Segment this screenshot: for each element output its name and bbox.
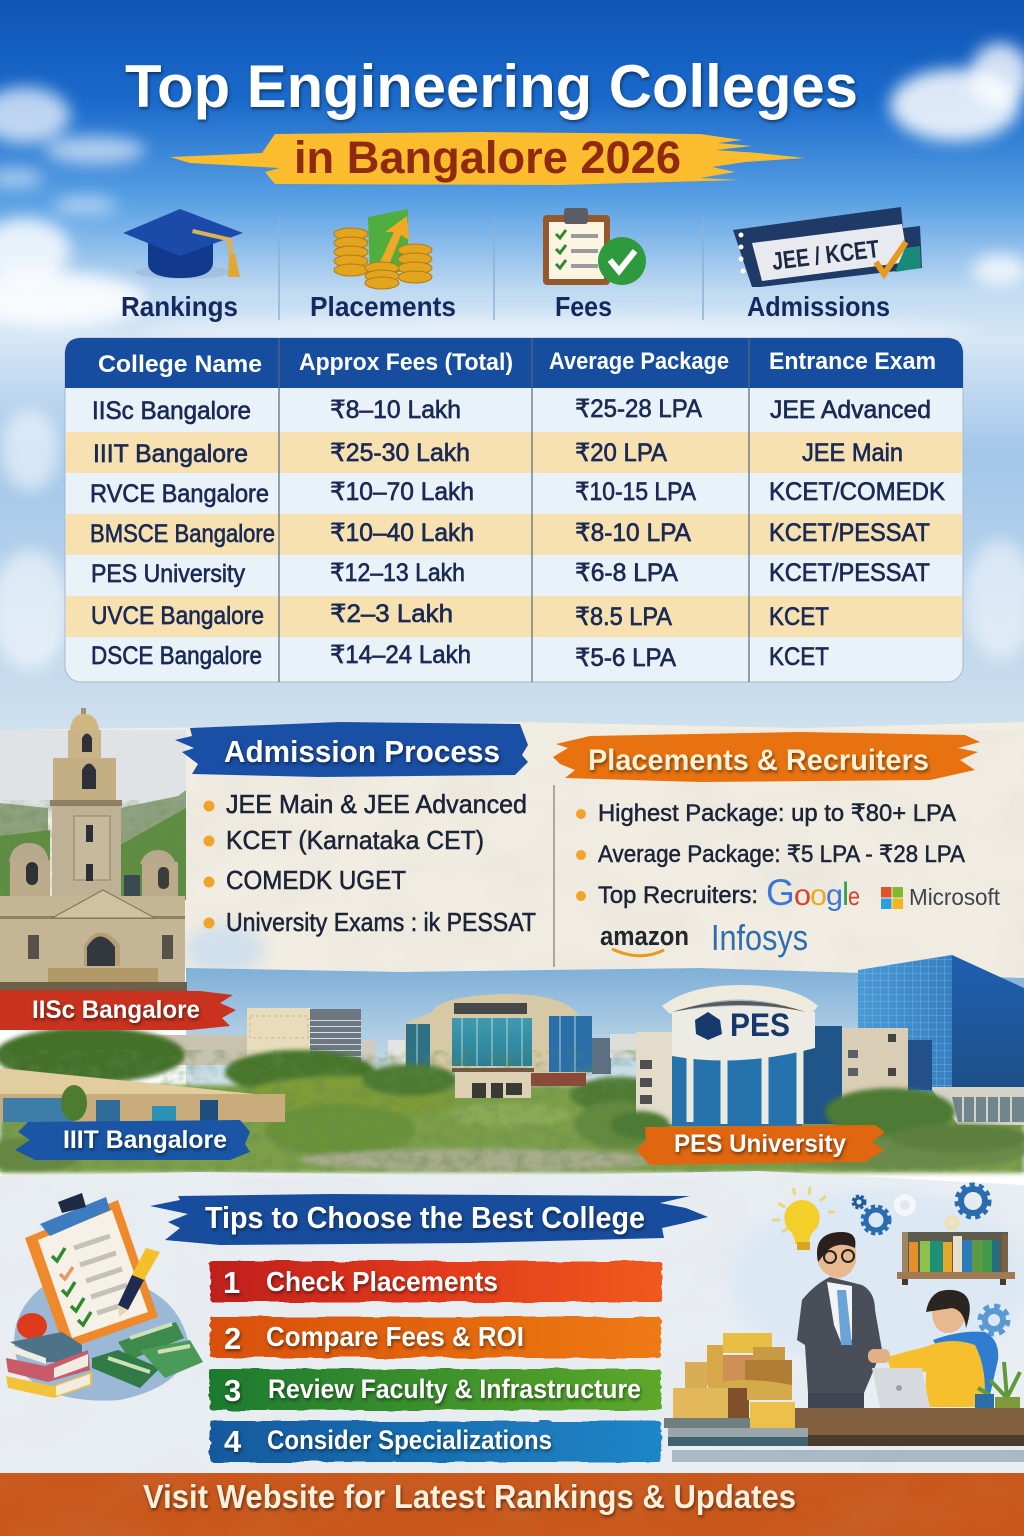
icon labels: Rankings bbox=[121, 291, 238, 322]
table rows: ₹20 LPA bbox=[575, 439, 667, 467]
hills behind tower bbox=[0, 790, 186, 900]
logo: Google: o bbox=[794, 879, 811, 912]
illustration: counsellor and student bbox=[664, 1185, 1024, 1446]
table rows: ₹10–40 Lakh bbox=[330, 519, 474, 547]
heading: tips bbox=[150, 1194, 708, 1245]
subtitle banner: in Bangalore 2026 bbox=[294, 132, 681, 183]
icon row bbox=[121, 207, 922, 322]
icon: JEE / KCET ticket: JEE / KCET bbox=[770, 235, 881, 276]
clouds bbox=[0, 43, 1024, 670]
logo: Google: o bbox=[810, 879, 827, 912]
table rows: ₹2–3 Lakh bbox=[330, 600, 453, 628]
building: blue glass tower bbox=[858, 955, 1024, 1125]
table rows: ₹25-28 LPA bbox=[575, 395, 702, 423]
paper panel: tips bbox=[0, 1171, 1024, 1480]
label: IISc Bangalore bbox=[0, 990, 236, 1030]
label: IIIT Bangalore bbox=[15, 1120, 250, 1160]
table rows: ₹10-15 LPA bbox=[575, 478, 696, 506]
tip 4: 4 bbox=[224, 1424, 242, 1459]
greenery bbox=[0, 1027, 1024, 1173]
label: PES University bbox=[636, 1125, 885, 1165]
tip 3: Review Faculty & Infrastructure bbox=[268, 1374, 641, 1404]
illustration: campus landscape bbox=[0, 955, 1024, 1173]
man in suit bbox=[797, 1232, 882, 1409]
table rows: ₹10–70 Lakh bbox=[330, 478, 474, 506]
table rows: IIIT Bangalore bbox=[93, 440, 248, 468]
logo: Google: G bbox=[766, 872, 795, 913]
table rows: IISc Bangalore bbox=[92, 397, 251, 425]
logo: Google bbox=[766, 872, 860, 913]
tip 3: 3 bbox=[224, 1373, 241, 1408]
foreground bushes bbox=[610, 1088, 1024, 1152]
placements list bbox=[576, 800, 965, 909]
heading: tips: Tips to Choose the Best College bbox=[205, 1200, 645, 1235]
table header: Average Package bbox=[549, 348, 729, 375]
main block bbox=[0, 890, 187, 991]
table rows: KCET bbox=[769, 603, 829, 631]
apple bowl bbox=[17, 1313, 47, 1339]
table rows: RVCE Bangalore bbox=[90, 480, 269, 508]
laptop bbox=[872, 1368, 930, 1408]
icon: clipboard with check bbox=[543, 208, 646, 285]
desk shadow bbox=[672, 1450, 1024, 1462]
placements list: Highest Package: up to ₹80+ LPA bbox=[598, 800, 956, 827]
tip 1 bbox=[210, 1261, 662, 1302]
bullets bbox=[204, 800, 214, 928]
table rows: JEE Advanced bbox=[770, 396, 931, 424]
admission list: University Exams : ik PESSAT bbox=[226, 907, 536, 937]
gold boxes bbox=[673, 1333, 855, 1428]
heading: admission process: Admission Process bbox=[224, 734, 500, 769]
sky background bbox=[0, 0, 1024, 730]
icon labels: Admissions bbox=[747, 291, 890, 322]
logo: amazon: amazon bbox=[600, 921, 689, 951]
table rows: KCET/PESSAT bbox=[769, 559, 930, 587]
left and right turrets bbox=[9, 843, 178, 897]
table rows: ₹14–24 Lakh bbox=[330, 641, 471, 669]
bell tower bbox=[50, 708, 122, 898]
table rows bbox=[90, 395, 945, 672]
admission list: COMEDK UGET bbox=[226, 865, 406, 895]
heading: admission process bbox=[175, 722, 528, 777]
table rows: DSCE Bangalore bbox=[91, 642, 262, 670]
table header: Entrance Exam bbox=[769, 348, 936, 375]
table rows: BMSCE Bangalore bbox=[90, 520, 275, 548]
money stacks bbox=[92, 1322, 203, 1388]
placements list: Average Package: ₹5 LPA - ₹28 LPA bbox=[598, 841, 965, 868]
foliage texture bbox=[0, 1050, 1024, 1172]
table rows: UVCE Bangalore bbox=[91, 602, 264, 630]
icon: coins and money bbox=[334, 209, 432, 289]
subtitle banner bbox=[170, 132, 805, 185]
footer banner bbox=[0, 1473, 1024, 1536]
illustration: IISc tower bbox=[0, 708, 187, 991]
tip 1: Check Placements bbox=[266, 1266, 498, 1297]
logo: Google: l bbox=[842, 876, 849, 912]
building: PES: PES bbox=[730, 1007, 790, 1043]
table rows: ₹8–10 Lakh bbox=[330, 396, 461, 424]
admission list: JEE Main & JEE Advanced bbox=[226, 789, 527, 819]
plant bbox=[975, 1362, 1020, 1413]
table rows: ₹12–13 Lakh bbox=[330, 559, 465, 587]
logo: Google: e bbox=[848, 881, 860, 911]
table rows: KCET bbox=[769, 643, 829, 671]
light bulb bbox=[772, 1187, 835, 1250]
admission list: KCET (Karnataka CET) bbox=[226, 825, 484, 855]
illustration: checklist, books and money bbox=[6, 1193, 203, 1401]
table rows: JEE Main bbox=[802, 439, 903, 467]
building: round glass bbox=[405, 994, 592, 1073]
tip 2 bbox=[210, 1317, 661, 1358]
books bbox=[6, 1332, 92, 1398]
paper panel: admission and placements bbox=[0, 722, 1024, 980]
small blocks bbox=[362, 1034, 638, 1074]
heading: placements and recruiters: Placements & Recruiters bbox=[588, 744, 929, 777]
icon: JEE / KCET ticket bbox=[733, 207, 922, 287]
desk bbox=[664, 1408, 1024, 1446]
bullets bbox=[576, 809, 586, 901]
label: IIIT Bangalore: IIIT Bangalore bbox=[63, 1126, 227, 1154]
icon labels bbox=[121, 291, 890, 322]
logo: Microsoft: Microsoft bbox=[909, 884, 1001, 910]
label: PES University: PES University bbox=[674, 1130, 846, 1158]
table rows: ₹8.5 LPA bbox=[575, 603, 672, 631]
low house bbox=[452, 1068, 586, 1098]
icon: graduation cap bbox=[123, 209, 243, 279]
title: Top Engineering Colleges bbox=[125, 53, 858, 120]
heading: placements and recruiters bbox=[553, 732, 980, 782]
tip 2: 2 bbox=[224, 1321, 241, 1356]
table rows: PES University bbox=[91, 560, 245, 588]
table header bbox=[98, 348, 936, 378]
building: IIIT bbox=[0, 1068, 285, 1122]
logo: Infosys: Infosys bbox=[711, 917, 808, 958]
table rows: ₹5-6 LPA bbox=[575, 644, 676, 672]
table rows: ₹6-8 LPA bbox=[575, 559, 678, 587]
tip 3 bbox=[209, 1369, 661, 1410]
clipboard bbox=[25, 1193, 158, 1350]
table rows: KCET/COMEDK bbox=[769, 478, 945, 506]
label: IISc Bangalore: IISc Bangalore bbox=[32, 996, 200, 1024]
admission list bbox=[204, 789, 536, 937]
student bbox=[868, 1290, 998, 1407]
comparison table bbox=[65, 338, 963, 682]
tip 1: 1 bbox=[223, 1265, 240, 1300]
table rows: ₹8-10 LPA bbox=[575, 519, 691, 547]
placements list: Top Recruiters: bbox=[598, 882, 758, 909]
bookshelf bbox=[897, 1232, 1015, 1285]
blue blob bbox=[14, 1275, 188, 1401]
building: PES bbox=[636, 985, 932, 1126]
tip 4 bbox=[210, 1421, 661, 1462]
table rows: ₹25-30 Lakh bbox=[330, 439, 470, 467]
building: hotel block bbox=[140, 1008, 361, 1067]
table header: College Name bbox=[98, 351, 262, 378]
icon labels: Placements bbox=[310, 291, 456, 322]
logo: Google: g bbox=[826, 879, 843, 912]
table header: Approx Fees (Total) bbox=[299, 349, 513, 376]
tip 2: Compare Fees & ROI bbox=[266, 1321, 524, 1352]
landscape sky bbox=[186, 968, 1024, 1100]
pencil bbox=[118, 1248, 160, 1317]
footer banner: Visit Website for Latest Rankings & Updates bbox=[143, 1478, 796, 1515]
tip 4: Consider Specializations bbox=[267, 1425, 552, 1455]
gears bbox=[853, 1185, 1008, 1334]
table rows: KCET/PESSAT bbox=[769, 519, 930, 547]
icon labels: Fees bbox=[555, 291, 612, 322]
